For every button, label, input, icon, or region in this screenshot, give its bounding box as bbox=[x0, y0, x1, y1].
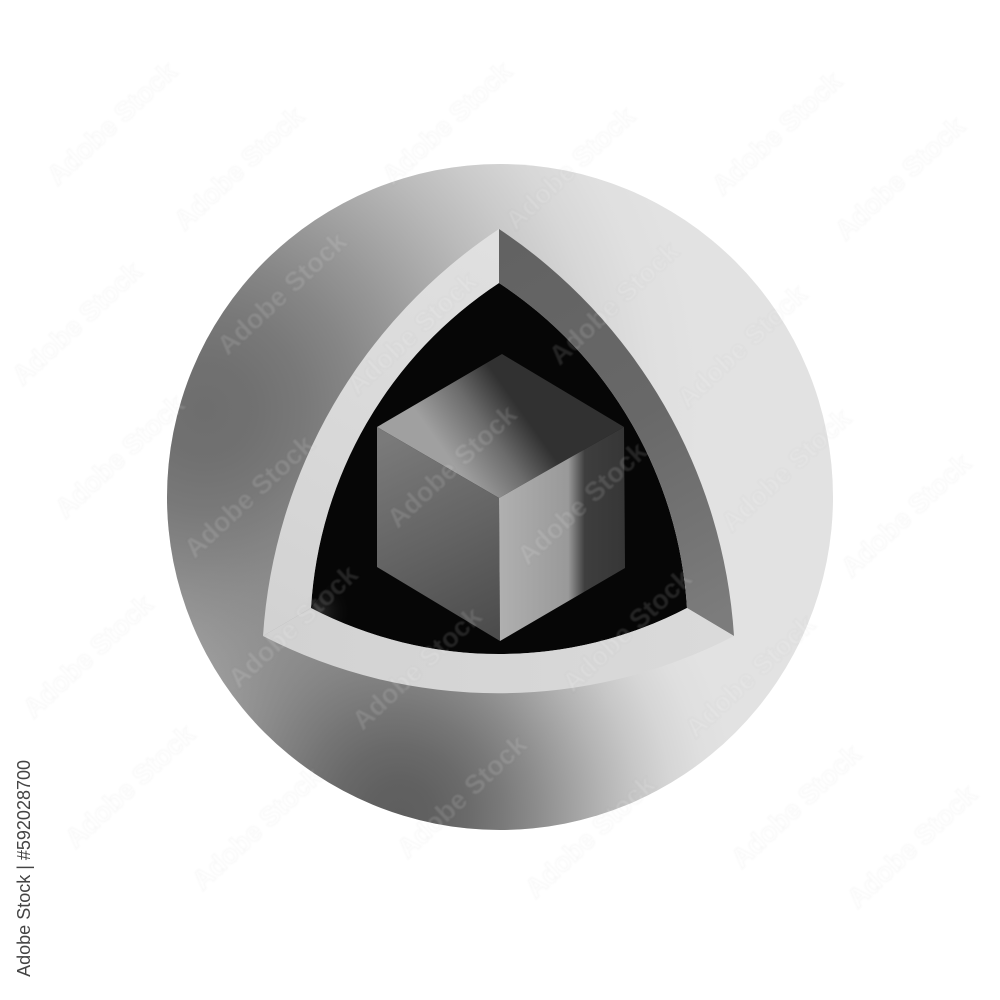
cube top face bbox=[377, 354, 624, 498]
stock id label: Adobe Stock | #592028700 bbox=[14, 760, 34, 977]
cutaway: dark interior bbox=[311, 283, 687, 654]
watermark pattern: Adobe Stock bbox=[178, 429, 320, 564]
watermark pattern: Adobe Stock bbox=[511, 436, 653, 571]
cutaway: left wall bbox=[263, 229, 499, 636]
watermark pattern: Adobe Stock bbox=[671, 279, 813, 414]
watermark pattern: Adobe Stock bbox=[679, 609, 821, 744]
watermark pattern: Adobe Stock bbox=[499, 101, 641, 236]
cutaway: right wall bbox=[499, 229, 734, 636]
watermark pattern: Adobe Stock bbox=[391, 729, 533, 864]
watermark pattern: Adobe Stock bbox=[543, 236, 685, 371]
watermark pattern: Adobe Stock bbox=[41, 56, 183, 191]
watermark pattern: Adobe Stock bbox=[49, 389, 191, 524]
watermark pattern: Adobe Stock bbox=[59, 719, 201, 854]
watermark pattern: Adobe Stock bbox=[725, 739, 867, 874]
watermark pattern: Adobe Stock bbox=[376, 56, 518, 191]
watermark pattern: Adobe Stock bbox=[341, 266, 483, 401]
watermark pattern: Adobe Stock bbox=[346, 601, 488, 736]
interior glow near floor bbox=[311, 570, 360, 630]
watermark pattern: Adobe Stock bbox=[168, 101, 310, 236]
cube bbox=[377, 354, 625, 641]
watermark pattern: Adobe Stock bbox=[6, 256, 148, 391]
cube left face bbox=[377, 427, 500, 641]
watermark pattern: Adobe Stock bbox=[835, 448, 977, 583]
watermark pattern: Adobe Stock bbox=[841, 779, 983, 914]
cube right face bbox=[499, 427, 625, 641]
watermark pattern: Adobe Stock bbox=[829, 111, 971, 246]
watermark pattern: Adobe Stock bbox=[222, 559, 364, 694]
watermark pattern: Adobe Stock bbox=[556, 563, 698, 698]
watermark pattern: Adobe Stock bbox=[706, 66, 848, 201]
watermark pattern: Adobe Stock bbox=[381, 399, 523, 534]
watermark pattern: Adobe Stock bbox=[211, 226, 353, 361]
watermark pattern: Adobe Stock bbox=[17, 589, 159, 724]
sphere body bbox=[167, 164, 833, 830]
cutaway: bottom wall bbox=[263, 608, 734, 693]
watermark pattern: Adobe Stock bbox=[186, 761, 328, 896]
watermark pattern: Adobe Stock bbox=[715, 403, 857, 538]
watermark pattern: Adobe Stock bbox=[519, 769, 661, 904]
